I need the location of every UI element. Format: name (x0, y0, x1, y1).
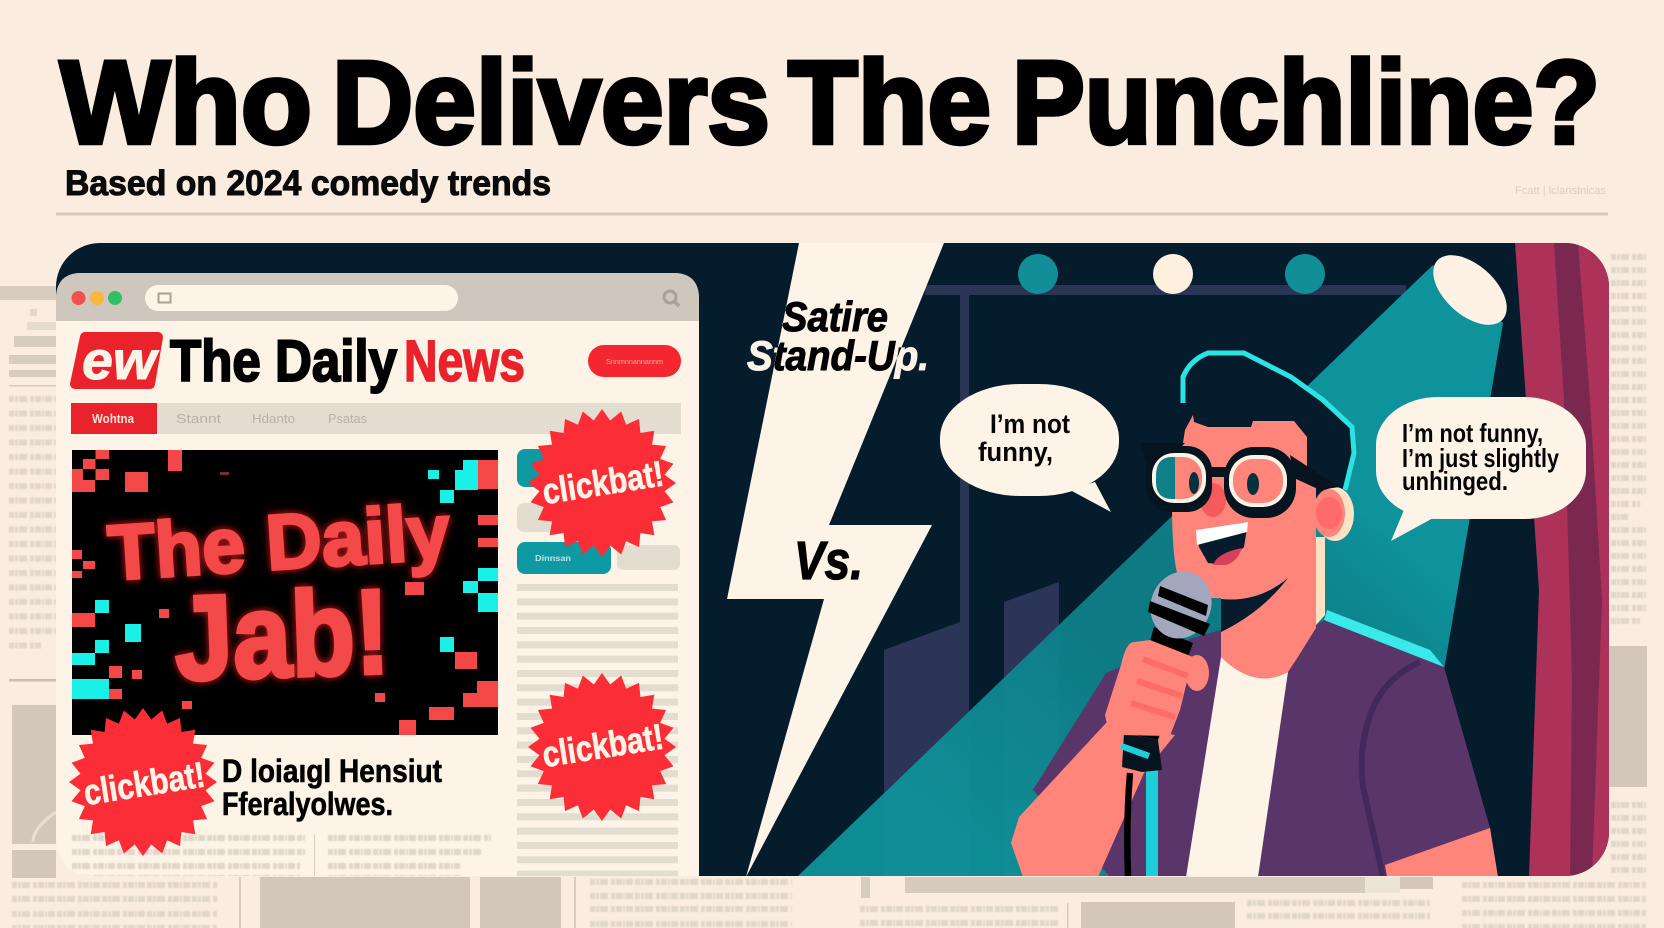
nav bar: Wohtna (92, 411, 135, 426)
article headline: Fferalyolwes. (222, 786, 393, 822)
speech bubble: full quote: I’m not funny, (1402, 418, 1543, 448)
browser toolbar (56, 273, 699, 321)
speech bubble: full quote (1376, 397, 1586, 541)
forearm (1011, 723, 1175, 877)
white t-shirt (1186, 657, 1288, 877)
shoulder highlight (1324, 610, 1444, 667)
lightning bolt divider (727, 243, 944, 877)
glitch pixels (72, 450, 498, 735)
subscribe button: Snnmnnannannm (606, 359, 663, 366)
nav bar: Psatas (328, 411, 367, 426)
speech bubble: full quote: unhinged. (1402, 466, 1508, 496)
spotlight lamp (1433, 255, 1507, 325)
site name (170, 338, 524, 394)
badge: clickbait left (69, 708, 217, 856)
badge: clickbait right (528, 673, 676, 821)
title: Delivers (332, 37, 770, 169)
badge: clickbait left: clickbat! (81, 754, 208, 813)
label: Vs.: Vs. (794, 531, 863, 591)
nav bar: Stannt (176, 411, 221, 426)
stage lights (1018, 254, 1325, 294)
sidebar widgets: Dinnsan (535, 554, 571, 563)
site name: The Daily (170, 329, 397, 394)
microphone (1120, 572, 1212, 876)
curtain (1515, 243, 1609, 877)
nose (1200, 483, 1226, 517)
mouth (1196, 522, 1248, 565)
label: Satire Stand-Up (747, 293, 929, 379)
title: Punchline? (1012, 37, 1600, 169)
speech bubble: full quote: I’m just slightly (1402, 443, 1559, 473)
article headline: D loiaıgl Hensiut (222, 753, 442, 789)
chin shadow (1221, 578, 1288, 632)
header rule (56, 212, 1608, 216)
neck rim (1316, 537, 1325, 625)
site name: News (404, 329, 525, 394)
glasses (1140, 443, 1339, 518)
shirt (1033, 620, 1498, 877)
badge: clickbait top: clickbat! (539, 453, 666, 512)
sidebar text stripes (517, 584, 678, 877)
nav bar: Hdanto (252, 411, 295, 426)
stage truss (925, 285, 1406, 720)
article body text (72, 834, 491, 878)
speech bubble: short: I’m not (990, 409, 1070, 439)
ear (1313, 487, 1354, 541)
badge: clickbait right: clickbat! (539, 716, 666, 775)
label: Satire Stand-Up: Stand-Up. (747, 332, 929, 379)
title (60, 37, 1600, 169)
nav bar (71, 403, 681, 434)
glitch headline text (100, 497, 456, 689)
mic stand (1146, 767, 1158, 877)
hero image: glitch headline (72, 450, 498, 735)
source credit: Fcatt | lclanstnicas (1515, 185, 1606, 197)
other arm (1385, 828, 1498, 877)
panel: stand-up stage (56, 242, 1609, 877)
label: Satire Stand-Up: Stand-Up. (747, 332, 929, 379)
sidebar widgets (517, 449, 680, 574)
panel: news website browser (56, 273, 699, 878)
subscribe button (588, 345, 681, 377)
hair (1183, 353, 1354, 500)
character: comedian (1011, 353, 1498, 877)
subtitle: Based on 2024 comedy trends (65, 164, 551, 203)
sleeve seam (1362, 662, 1420, 877)
label: Satire Stand-Up: Satire (782, 293, 888, 340)
city silhouettes (884, 582, 1059, 793)
article headline (222, 753, 442, 822)
face and neck (1172, 415, 1316, 678)
label: Satire Stand-Up: Satire (782, 293, 888, 340)
glitch headline text: The Daily (105, 487, 452, 597)
spotlight beam (797, 265, 1503, 877)
hand (1105, 640, 1209, 736)
speech bubble: short: funny, (978, 437, 1053, 467)
site logo: ew (82, 331, 159, 391)
speech bubble: short (940, 384, 1119, 512)
glitch headline text: Jab! (172, 565, 392, 706)
badge: clickbait top (528, 409, 676, 557)
title: Who (60, 37, 312, 169)
title: The (788, 37, 991, 169)
